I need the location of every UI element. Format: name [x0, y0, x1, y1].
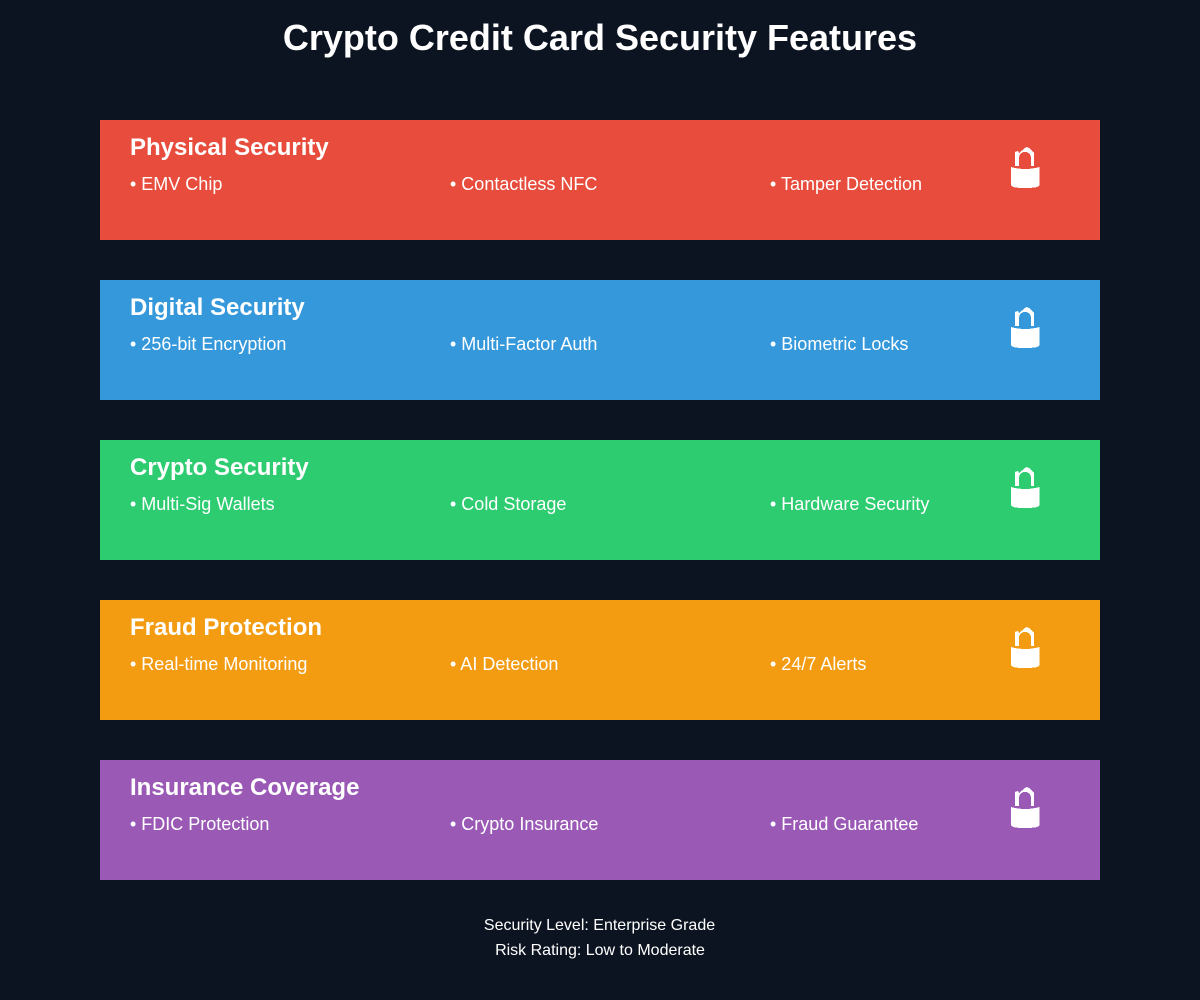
feature list: fraud protection: • 24/7 Alerts	[770, 654, 866, 674]
feature list: insurance coverage: • Crypto Insurance	[450, 814, 598, 834]
panel: insurance coverage	[100, 760, 1100, 880]
icon: lock	[1011, 147, 1040, 188]
feature list: physical security: • Tamper Detection	[770, 174, 922, 194]
feature list: physical security: • EMV Chip	[130, 174, 222, 194]
feature list: physical security	[130, 174, 922, 194]
feature list: insurance coverage: • FDIC Protection	[130, 814, 269, 834]
panel: physical security	[100, 120, 1100, 240]
feature list: fraud protection: • Real-time Monitoring	[130, 654, 307, 674]
feature list: crypto security: • Hardware Security	[770, 494, 929, 514]
feature list: digital security: • 256-bit Encryption	[130, 334, 286, 354]
heading: digital security: Digital Security	[130, 294, 305, 321]
feature list: digital security	[130, 334, 908, 354]
feature list: fraud protection: • AI Detection	[450, 654, 558, 674]
feature list: crypto security: • Cold Storage	[450, 494, 566, 514]
footer text: Security Level: Enterprise Grade	[484, 917, 715, 934]
panel: fraud protection	[100, 600, 1100, 720]
feature list: digital security: • Multi-Factor Auth	[450, 334, 597, 354]
feature list: crypto security: • Multi-Sig Wallets	[130, 494, 275, 514]
icon: lock	[1011, 787, 1040, 828]
heading: crypto security: Crypto Security	[130, 454, 309, 481]
icon: lock	[1011, 627, 1040, 668]
feature list: digital security: • Biometric Locks	[770, 334, 908, 354]
feature list: insurance coverage	[130, 814, 918, 834]
footer text: Risk Rating: Low to Moderate	[495, 942, 705, 959]
heading: physical security: Physical Security	[130, 134, 329, 161]
panel: digital security	[100, 280, 1100, 400]
heading: insurance coverage: Insurance Coverage	[130, 774, 359, 801]
feature list: crypto security	[130, 494, 929, 514]
feature list: physical security: • Contactless NFC	[450, 174, 597, 194]
icon: lock	[1011, 307, 1040, 348]
feature list: fraud protection	[130, 654, 866, 674]
panel: crypto security	[100, 440, 1100, 560]
icon: lock	[1011, 467, 1040, 508]
footer text	[484, 917, 715, 959]
title: Crypto Credit Card Security Features	[283, 17, 917, 58]
heading: fraud protection: Fraud Protection	[130, 614, 322, 641]
feature list: insurance coverage: • Fraud Guarantee	[770, 814, 918, 834]
